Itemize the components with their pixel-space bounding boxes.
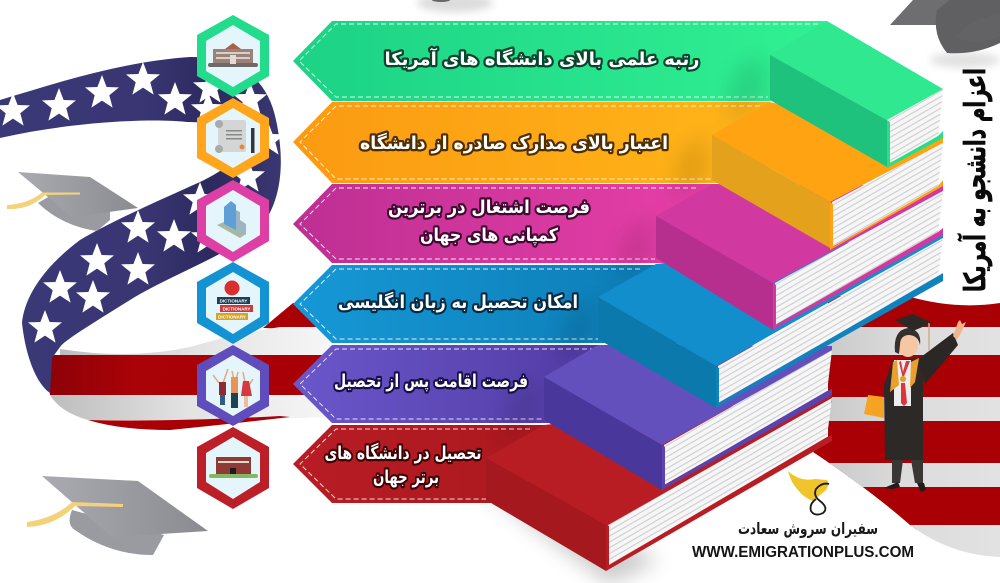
book 5 purple [544, 345, 832, 490]
banner text 6 [324, 442, 482, 488]
hexagon icon 3: skyscraper [197, 180, 269, 262]
hexagon icon 4: dictionaries and apple [197, 262, 269, 344]
graduation cap: top centre shadow [417, 0, 493, 12]
head [898, 333, 918, 357]
book 3 magenta [656, 184, 943, 330]
banner text 4: امکان تحصیل به زبان انگلیسی [338, 291, 578, 313]
website url: WWW.EMIGRATIONPLUS.COM [692, 544, 914, 561]
raised arm [917, 333, 958, 384]
graduate character [864, 314, 966, 492]
logo [692, 471, 914, 561]
banner 1 green [293, 21, 827, 101]
banner 3 magenta [293, 184, 730, 263]
hair [895, 328, 920, 354]
banner text 6: تحصیل در دانشگاه های [324, 442, 482, 464]
graduation cap: left middle [7, 172, 138, 231]
banner shadows from books [500, 55, 765, 445]
stole [890, 358, 919, 392]
banner 4 blue [293, 265, 680, 343]
ribbon with stars [0, 57, 285, 393]
banner text 3: فرصت اشتغال در برترین [388, 197, 590, 218]
logo icon: winged swan [788, 471, 829, 515]
hexagon icon 4: dictionaries and apple: DICTIONARY [223, 306, 250, 312]
banner text 3: کمپانی های جهان [420, 225, 558, 246]
gown [884, 358, 923, 460]
book 2 orange [712, 102, 943, 250]
shirt [894, 360, 911, 406]
banner 5 purple [293, 345, 640, 423]
book 1 green [770, 21, 943, 168]
book 6 red [486, 396, 832, 571]
banner text 2: اعتبار بالای مدارک صادره از دانشگاه [360, 132, 668, 154]
shoes [884, 482, 926, 492]
flag swoosh: right stripes [810, 290, 1000, 560]
hexagon icon 5: celebrating people [197, 345, 269, 426]
logo wordmark: سفیران سروش سعادت [738, 519, 878, 538]
hexagon icon 2: certificate [197, 98, 269, 178]
flag swoosh: left stripes [48, 303, 330, 430]
hand [953, 320, 966, 340]
hexagon icon 6: school building [197, 427, 269, 509]
banner 6 red [293, 425, 600, 503]
hexagon icon 1: university [197, 15, 269, 97]
banner text 1: رتبه علمی بالای دانشگاه های آمریکا [384, 47, 700, 70]
graduation cap: bottom left [27, 476, 208, 555]
book stack [293, 21, 943, 583]
book 4 blue [598, 232, 943, 408]
legs [892, 460, 923, 483]
medal [900, 376, 906, 382]
hexagon icon 4: dictionaries and apple: DICTIONARY [220, 298, 247, 304]
mortarboard [895, 314, 932, 331]
banner text 5: فرصت اقامت پس از تحصیل [334, 371, 528, 392]
folder [864, 395, 884, 418]
banner 2 orange [293, 102, 769, 183]
banner text 3 [388, 197, 590, 246]
tie and medal [899, 361, 910, 406]
graduation cap: top right [890, 0, 1000, 68]
tassel [928, 323, 930, 350]
hexagon icon 4: dictionaries and apple: DICTIONARY [218, 314, 246, 320]
banner text 6: برتر جهان [373, 467, 439, 488]
ribbon stars [0, 62, 285, 343]
soft shadow under stack [470, 480, 660, 583]
